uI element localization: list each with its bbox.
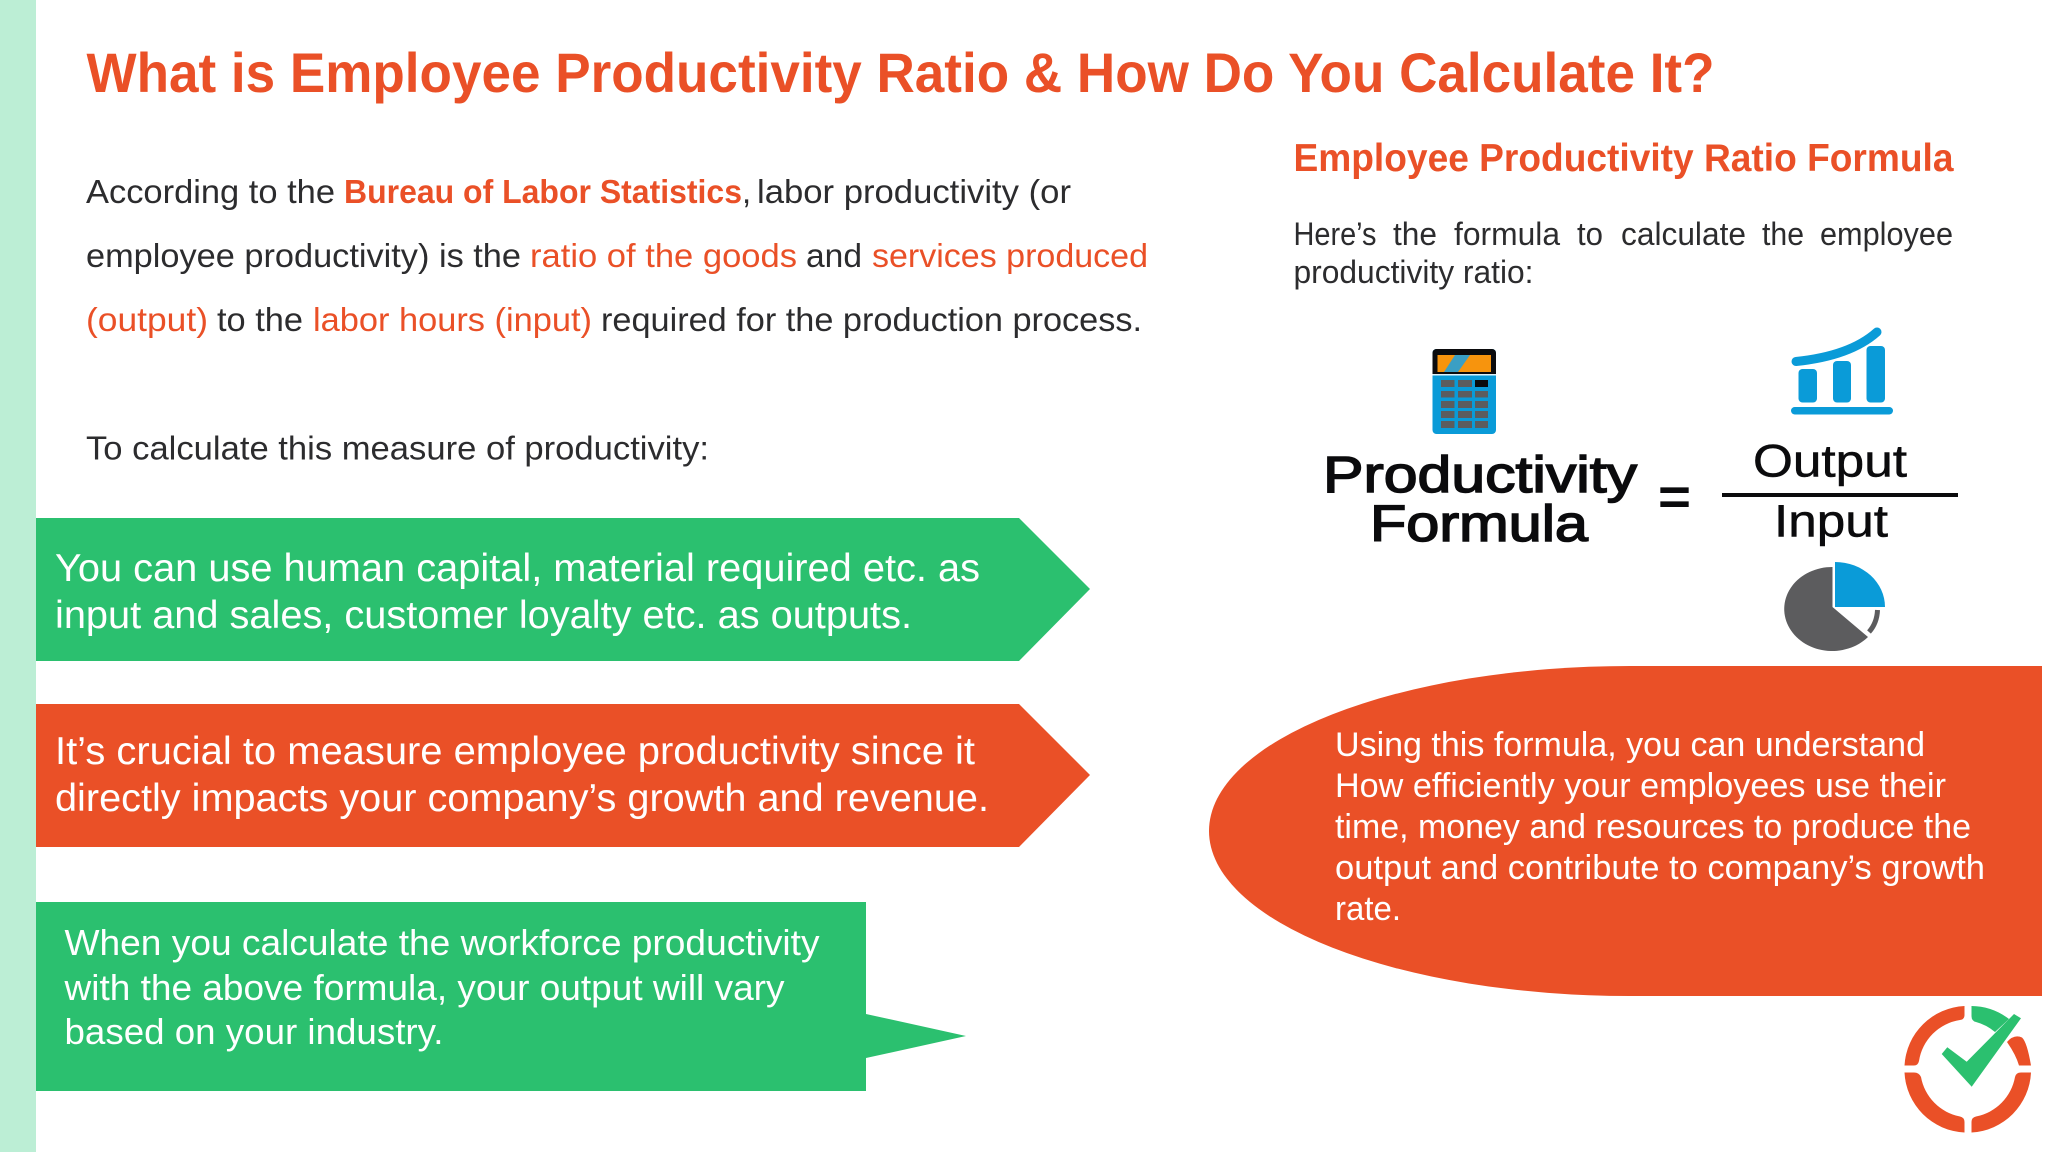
callout: using this formula: output and contribute to company’s growth [1335,849,1985,887]
fraction: output over input [1722,436,1958,546]
formula intro text: the [1393,216,1437,252]
intro paragraph: employee productivity) is the [86,237,521,274]
equals sign: = [1658,468,1691,526]
arrow panel: inputs and outputs: input and sales, customer loyalty etc. as outputs. [55,594,912,637]
icon: logo clock with checkmark [1904,1006,2031,1132]
formula left side: Formula [1370,495,1589,552]
formula intro text: productivity ratio: [1294,254,1534,290]
arrow panel: inputs and outputs: You can use human capital, material required etc. as [55,547,980,590]
arrow panel: why it matters: It’s crucial to measure employee productivity since it [55,730,975,773]
callout: using this formula: Using this formula, you can understand [1335,726,1925,764]
sidebar strip [0,0,36,1152]
intro paragraph: to the [217,301,303,338]
intro paragraph: ratio of the goods [530,237,797,274]
intro paragraph: labor productivity (or [757,173,1071,210]
intro paragraph: services produced [872,237,1148,274]
icon: rising bar chart [1791,332,1893,414]
intro paragraph: Bureau of Labor Statistics [344,173,742,210]
intro paragraph: labor hours (input) [313,301,592,338]
icon: calculator [1432,349,1496,434]
arrow panel: why it matters: directly impacts your company’s growth and revenue. [55,777,989,820]
callout: using this formula: time, money and resources to produce the [1335,808,1971,846]
callout panel: output varies by industry: based on your industry. [64,1011,444,1052]
intro paragraph: required for the production process. [601,301,1142,338]
intro paragraph: According to the [86,173,335,210]
formula left side [1323,446,1638,552]
intro paragraph: (output) [86,301,208,338]
callout panel: output varies by industry: with the above formula, your output will vary [63,967,784,1008]
intro paragraph: , [742,173,751,210]
callout panel: output varies by industry: When you calculate the workforce productivity [64,922,820,963]
formula intro text: to [1577,216,1603,252]
fraction: output over input: Output [1753,436,1908,486]
icon: pie chart [1784,562,1885,651]
formula intro text: the [1762,216,1804,252]
formula left side: Productivity [1323,446,1638,503]
formula intro text: formula [1454,216,1560,252]
intro paragraph: and [806,237,862,274]
callout panel: output varies by industry [36,902,966,1091]
callout: using this formula: rate. [1335,890,1401,928]
intro paragraph [86,173,1148,338]
formula intro text: calculate [1621,216,1746,252]
callout: using this formula [1209,666,2042,996]
formula heading: Employee Productivity Ratio Formula [1294,137,1954,180]
arrow panel: inputs and outputs [36,518,1090,661]
title: What is Employee Productivity Ratio & How Do You Calculate It? [86,41,1714,104]
formula intro text: Here’s [1294,216,1376,252]
callout: using this formula: How efficiently your employees use their [1335,767,1946,805]
formula intro text: employee [1820,216,1953,252]
fraction: output over input: Input [1774,496,1889,546]
formula intro text [1294,216,1953,290]
lead-in sentence: To calculate this measure of productivity: [86,430,709,466]
arrow panel: why it matters [36,704,1090,847]
